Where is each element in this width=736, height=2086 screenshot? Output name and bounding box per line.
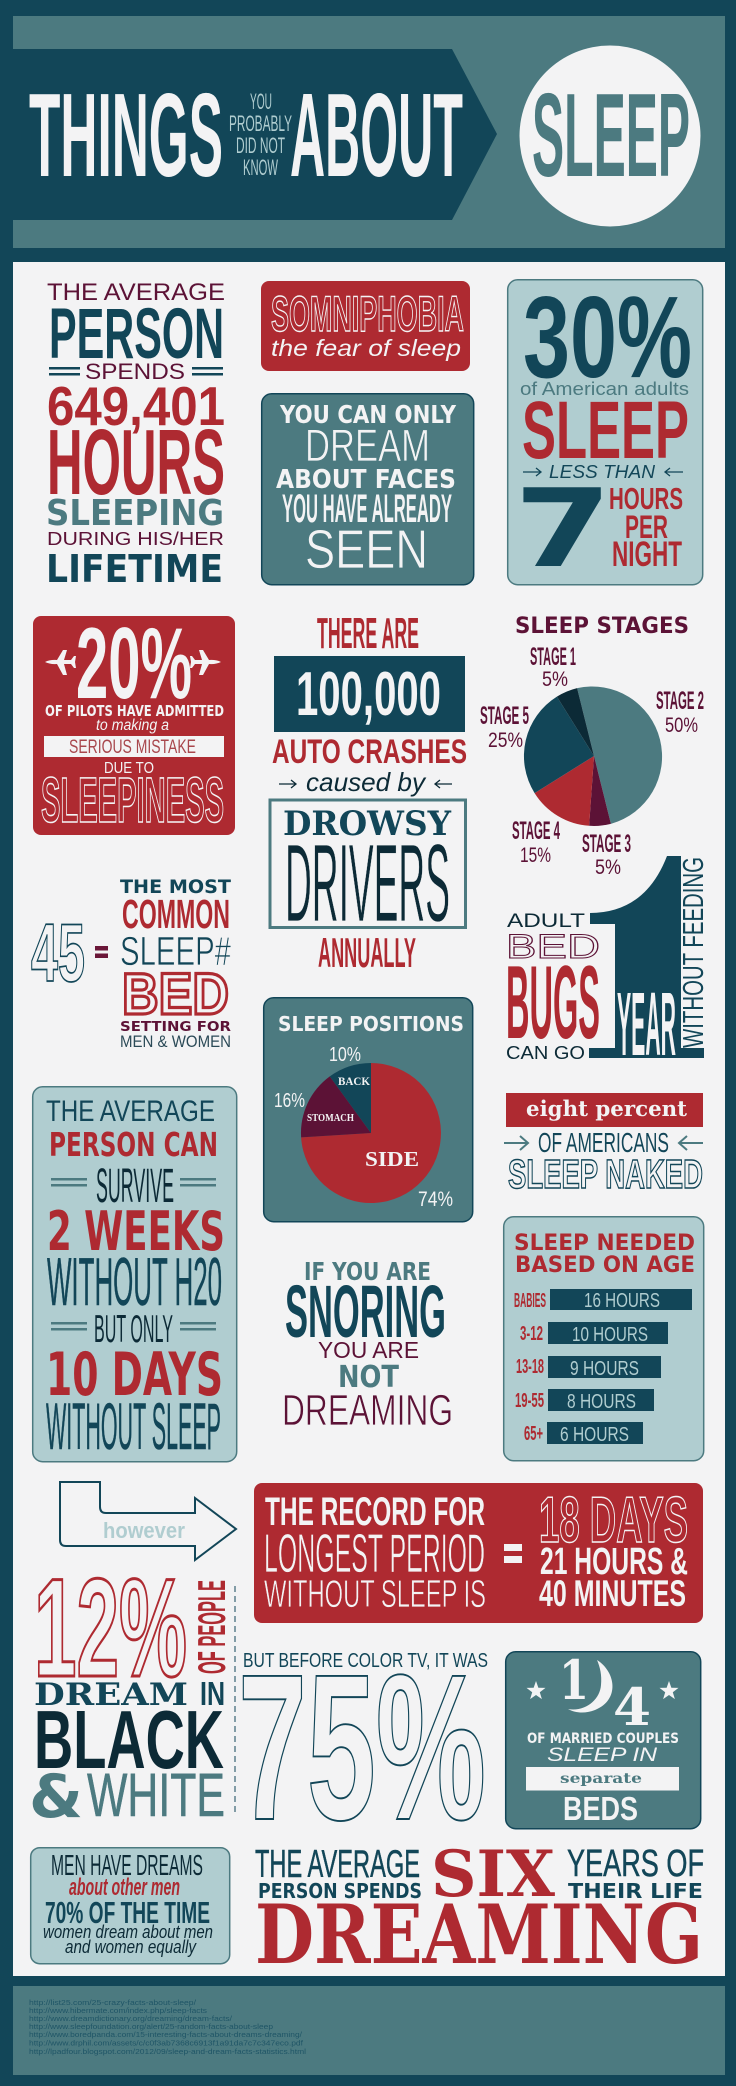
panel: survive without water and sleep: PERSON CAN <box>49 1125 218 1164</box>
panel: pilots 20 percent: OF PILOTS HAVE ADMITTED <box>45 702 224 720</box>
text block: average person hours <box>46 279 225 591</box>
panel: survive without water and sleep: SURVIVE <box>96 1160 174 1213</box>
panel: sleep record: WITHOUT SLEEP IS <box>264 1573 486 1616</box>
text block: 45 sleep number: SLEEP# <box>120 928 231 974</box>
arrow <box>279 780 296 788</box>
text block: before color tv 75 percent: 75% <box>238 1632 486 1864</box>
panel: somniphobia <box>261 281 470 371</box>
text block: 12 percent dream in black and white <box>29 1549 234 1832</box>
header banner <box>0 16 725 248</box>
bar: babies: 16 HOURS <box>584 1290 660 1312</box>
footer: sources <box>13 1986 725 2075</box>
text block: 12 percent dream in black and white: BLACK <box>34 1693 224 1786</box>
panel: pilots 20 percent: to making a <box>96 717 169 734</box>
text block: average person hours: PERSON <box>49 295 224 374</box>
panel: sleep positions chart: 10% <box>329 1044 361 1066</box>
text block: average person hours: DURING HIS/HER <box>47 528 224 549</box>
chart: sleep stages pie: 5% <box>595 856 621 879</box>
text block: auto crashes: 100,000 <box>296 660 441 729</box>
text block: eight percent sleep naked: eight percent <box>526 1096 687 1121</box>
panel: somniphobia: SOMNIPHOBIA <box>271 286 464 342</box>
text block: average person hours: THE AVERAGE <box>47 279 225 306</box>
panel: sleep positions chart: 16% <box>274 1090 305 1112</box>
chart: sleep stages pie: STAGE 1 <box>530 643 576 671</box>
arrow <box>665 468 683 476</box>
panel: survive without water and sleep <box>33 1087 237 1463</box>
text block: auto crashes <box>270 609 467 976</box>
icon: crescent moon <box>568 1660 613 1713</box>
text block: bed bugs one year: BED <box>506 928 600 966</box>
bar: 3-12: 3-12 <box>520 1323 543 1345</box>
panel: sleep positions chart: STOMACH <box>307 1113 354 1124</box>
panel: sleep positions chart: BACK <box>338 1076 370 1088</box>
text block: before color tv 75 percent: BUT BEFORE COLOR TV, IT WAS <box>243 1650 488 1672</box>
bar: 13-18 <box>516 1356 661 1380</box>
panel: 30 percent sleep less than 7 hours: LESS THAN <box>549 462 656 482</box>
bar: 65+: 65+ <box>524 1423 543 1445</box>
bar: 19-55: 8 HOURS <box>567 1391 636 1413</box>
sleep circle <box>520 46 700 226</box>
text block: six years dreaming: SIX <box>431 1837 555 1912</box>
text: WITHOUT H20 <box>47 1244 222 1320</box>
text block: 45 sleep number: MEN & WOMEN <box>120 1032 231 1051</box>
panel: 30 percent sleep less than 7 hours: PER <box>625 509 668 545</box>
bar: 19-55: 19-55 <box>515 1390 544 1412</box>
text block: 45 sleep number: COMMON <box>122 891 230 937</box>
panel: 30 percent sleep less than 7 hours <box>508 272 703 592</box>
text block: auto crashes: caused by <box>306 767 427 797</box>
text block: six years dreaming: THEIR LIFE <box>568 1879 703 1903</box>
text block: average person hours: 649,401 <box>47 375 225 437</box>
panel: sleep positions chart: 74% <box>418 1188 453 1211</box>
panel: dream about faces <box>262 394 474 585</box>
panel: dream about faces: YOU CAN ONLY <box>279 400 456 429</box>
chart: sleep stages pie <box>480 614 704 879</box>
title: KNOW <box>243 155 278 180</box>
bar: 3-12: 10 HOURS <box>572 1324 648 1346</box>
footer: sources: http://www.dreamdictionary.org/dreaming/dream-facts/ <box>29 2014 233 2023</box>
text block: auto crashes: ANNUALLY <box>318 929 416 976</box>
text: SLEEPINESS <box>41 764 224 836</box>
bar: 65+: 6 HOURS <box>560 1424 629 1446</box>
chart: sleep stages pie: STAGE 3 <box>582 830 631 858</box>
panel: men have dreams: MEN HAVE DREAMS <box>51 1850 203 1882</box>
panel: 30 percent sleep less than 7 hours: HOURS <box>609 481 683 516</box>
panel: dream about faces: ABOUT FACES <box>276 465 456 495</box>
text block: six years dreaming: THE AVERAGE <box>255 1843 420 1886</box>
header banner: ABOUT <box>290 69 463 202</box>
text block: 45 sleep number: 45 <box>31 906 85 999</box>
arrow <box>435 780 452 788</box>
bar: babies: BABIES <box>514 1290 546 1312</box>
text block: 45 sleep number <box>31 876 231 1051</box>
chart: sleep stages pie: SLEEP STAGES <box>515 614 689 639</box>
text block: snoring <box>282 1257 453 1435</box>
bar: 13-18: 13-18 <box>516 1356 544 1378</box>
title: PROBABLY <box>229 111 292 136</box>
icon: star left <box>526 1681 546 1699</box>
bar: 65+ <box>524 1422 643 1446</box>
bar: 19-55 <box>515 1389 654 1413</box>
text block: snoring: IF YOU ARE <box>304 1257 431 1286</box>
text block: 12 percent dream in black and white: IN <box>200 1675 225 1712</box>
footer: sources: http://www.drphil.com/assets/c/c0f3ab7368c6913f1a91da7c7c347eco.pdf <box>29 2038 304 2048</box>
panel: quarter of married couples <box>506 1648 701 1829</box>
text block: snoring: NOT <box>338 1360 399 1395</box>
text block: average person hours: HOURS <box>47 410 225 514</box>
text block: snoring: YOU ARE <box>318 1337 419 1363</box>
arrow <box>679 1136 703 1150</box>
footer: sources: http://www.boredpanda.com/15-interesting-facts-about-dreams-dreaming/ <box>29 2030 303 2039</box>
chart: sleep stages pie: 25% <box>488 729 523 752</box>
footer: sources: http://lpadfour.blogspot.com/2012/09/sleep-and-dream-facts-statistics.html <box>29 2047 306 2056</box>
panel: 30 percent sleep less than 7 hours: 7 <box>514 467 612 592</box>
text block: 45 sleep number: THE MOST <box>120 876 231 898</box>
panel: sleep positions chart <box>264 998 473 1222</box>
bar: babies <box>514 1289 692 1312</box>
text block: bed bugs one year: WITHOUT FEEDING <box>678 857 710 1048</box>
text block: bed bugs one year: CAN GO <box>506 1043 585 1063</box>
title: YOU <box>250 89 272 114</box>
panel: sleep needed by age <box>504 1217 704 1461</box>
panel: survive without water and sleep: 2 WEEKS <box>47 1200 225 1263</box>
arrow <box>504 1136 528 1150</box>
text block: bed bugs one year: ADULT <box>507 911 585 932</box>
panel: somniphobia: the fear of sleep <box>271 335 461 361</box>
panel: quarter of married couples: 1 <box>559 1648 589 1712</box>
text block: eight percent sleep naked <box>504 1093 703 1197</box>
panel: survive without water and sleep: 10 DAYS <box>46 1340 223 1410</box>
panel: pilots 20 percent: DUE TO <box>104 760 154 777</box>
text block: average person hours: LIFETIME <box>46 547 223 591</box>
chart: sleep stages pie: 50% <box>665 714 698 737</box>
panel: quarter of married couples: 4 <box>613 1678 651 1738</box>
arrow <box>523 468 541 476</box>
panel: sleep record: THE RECORD FOR <box>265 1490 485 1534</box>
main content panel <box>13 262 725 1976</box>
panel: pilots 20 percent: SERIOUS MISTAKE <box>69 737 196 758</box>
number one shape <box>589 856 704 1058</box>
chart: sleep stages pie: STAGE 5 <box>480 702 529 730</box>
chart: sleep stages pie: 5% <box>542 668 568 691</box>
footer: sources: http://www.sleepfoundation.org/alert/25-random-facts-about-sleep <box>29 2022 273 2031</box>
footer: sources: http://www.hibermate.com/index.php/sleep-facts <box>29 2006 207 2015</box>
text block: 45 sleep number: SETTING FOR <box>120 1019 231 1035</box>
panel: men have dreams: and women equally <box>65 1936 197 1957</box>
text block: average person hours: SPENDS <box>85 359 185 384</box>
text block: six years dreaming <box>255 1837 704 1983</box>
panel: dream about faces: DREAM <box>305 420 430 471</box>
panel: men have dreams: women dream about men <box>43 1921 213 1942</box>
panel: 30 percent sleep less than 7 hours: NIGHT <box>612 535 682 574</box>
panel: pilots 20 percent: 20% <box>76 608 192 720</box>
text block: six years dreaming: PERSON SPENDS <box>258 1879 422 1903</box>
title: THINGS <box>29 69 223 202</box>
panel: sleep record <box>254 1483 703 1623</box>
text: SNORING <box>285 1270 446 1353</box>
arrow: however <box>60 1482 236 1560</box>
text block: 12 percent dream in black and white: & <box>29 1762 83 1832</box>
text block: bed bugs one year <box>506 856 710 1075</box>
panel: men have dreams <box>31 1848 230 1964</box>
panel: pilots 20 percent <box>33 608 235 836</box>
text block: average person hours: SLEEPING <box>46 493 224 534</box>
text: YOU HAVE ALREADY <box>282 487 452 531</box>
text block: 12 percent dream in black and white: 12% <box>34 1549 187 1706</box>
icon: plane right <box>190 650 221 675</box>
panel: men have dreams: about other men <box>69 1874 180 1901</box>
icon: plane left <box>45 650 76 675</box>
panel: sleep positions chart: SIDE <box>365 1147 419 1171</box>
panel: dream about faces: SEEN <box>305 518 428 580</box>
bar: 13-18: 9 HOURS <box>570 1358 639 1380</box>
panel: quarter of married couples: OF MARRIED COUPLES <box>527 1731 679 1747</box>
panel: quarter of married couples: SLEEP IN <box>547 1745 657 1766</box>
text block: before color tv 75 percent <box>238 1632 488 1864</box>
text block: auto crashes: THERE ARE <box>317 609 419 658</box>
arrow: however: however <box>103 1518 185 1543</box>
text: WITHOUT SLEEP <box>46 1389 221 1463</box>
icon: star right <box>660 1681 678 1699</box>
panel: 30 percent sleep less than 7 hours: of American adults <box>520 378 689 399</box>
text block: auto crashes: DROWSY <box>283 804 452 844</box>
text block: 12 percent dream in black and white: WHITE <box>87 1761 225 1829</box>
panel: men have dreams: 70% OF THE TIME <box>45 1895 210 1930</box>
chart: sleep stages pie: STAGE 4 <box>512 817 560 845</box>
title: DID NOT <box>236 133 285 158</box>
panel: sleep positions chart: SLEEP POSITIONS <box>278 1012 464 1036</box>
footer: sources: http://list25.com/25-crazy-facts-about-sleep/ <box>29 1998 197 2007</box>
panel: survive without water and sleep: BUT ONLY <box>94 1308 173 1351</box>
text block: 12 percent dream in black and white: DREAM <box>34 1677 188 1713</box>
text block: snoring: DREAMING <box>282 1386 453 1435</box>
text block: 12 percent dream in black and white: OF PEOPLE <box>191 1580 234 1674</box>
panel: survive without water and sleep: THE AVERAGE <box>46 1095 215 1128</box>
text block: 45 sleep number: BED <box>122 962 229 1027</box>
text block: auto crashes: AUTO CRASHES <box>272 733 467 771</box>
header arrow <box>0 49 497 220</box>
bar: 3-12 <box>520 1322 668 1346</box>
panel: sleep needed by age: SLEEP NEEDED <box>514 1231 695 1256</box>
panel: quarter of married couples: BEDS <box>563 1790 638 1827</box>
panel: quarter of married couples: separate <box>560 1771 642 1787</box>
panel: sleep needed by age: BASED ON AGE <box>515 1253 695 1278</box>
chart: sleep stages pie: 15% <box>520 844 551 867</box>
